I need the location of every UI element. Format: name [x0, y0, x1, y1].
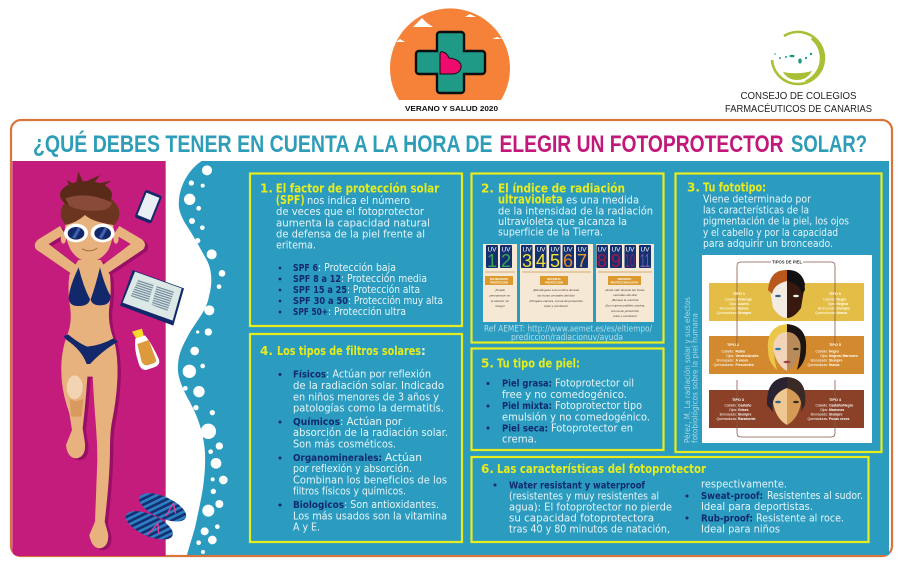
heading 2: El índice de radiación: [498, 182, 625, 196]
UV index chart: solar y sombrero!: [613, 314, 637, 318]
chart labels: Bronceado:: [717, 358, 734, 362]
filter list: Actúan: [385, 452, 422, 464]
filter list: filtros físicos y químicos.: [293, 486, 406, 498]
chart labels: Bronceado:: [720, 306, 737, 310]
chart labels: Negros/ Marrones: [829, 354, 858, 358]
UV index chart: centrales del día!: [613, 293, 637, 297]
heading 5: Tu tipo de piel:: [497, 356, 580, 370]
panel: woman on pink towel: [12, 161, 228, 556]
panel 3: tu fototipo: [676, 174, 882, 452]
legs: [61, 363, 88, 458]
chart labels: Raramente: [738, 417, 756, 421]
UV index chart: 7: [577, 251, 587, 271]
UV index chart: UV: [501, 246, 511, 254]
logo: Consejo de Colegios Farmacéuticos de Canarias: [725, 32, 872, 115]
UV index chart: 10: [625, 251, 635, 271]
UV index chart: UV: [577, 246, 587, 254]
face: tipo 3 y 4: [767, 377, 805, 425]
UV index chart: 5: [550, 251, 560, 271]
heading 4: Los tipos de filtros solares: [277, 344, 421, 358]
SPF list: SPF 6: [293, 263, 318, 274]
description 1: de defensa de la piel frente al: [276, 230, 425, 241]
characteristics list: tras 40 y 80 minutos de natación,: [509, 524, 670, 536]
chart labels: Nunca: [829, 363, 839, 367]
chart labels: Ojos:: [729, 408, 737, 412]
chart labels: Negro: [836, 298, 846, 302]
figure shadow: [38, 228, 148, 550]
panel 2: índice de radiación ultravioleta: [472, 174, 664, 343]
description 2: superficie de la Tierra.: [498, 228, 603, 239]
SPF list: : Protección ultra: [328, 306, 406, 318]
filter list: Los más usados son la vitamina: [293, 510, 447, 522]
chart labels: Nunca: [836, 311, 847, 315]
bikini bottom: [63, 335, 118, 364]
bikini top: [69, 267, 111, 306]
characteristics list: Ideal para niños: [701, 524, 780, 535]
face: tipo 2 y 5: [768, 324, 806, 371]
title: SOLAR?: [791, 131, 867, 158]
chart labels: Cabello:: [816, 350, 828, 354]
heading 1: 1.: [260, 182, 273, 196]
chart labels: Bronceado:: [720, 412, 737, 416]
towel: [12, 161, 166, 556]
UV index chart: ¡Manténgase a la sombra durante: [533, 288, 579, 292]
characteristics list: [494, 479, 863, 536]
description 3: para adquirir un bronceado.: [703, 239, 833, 250]
UV index chart: UV: [625, 246, 635, 254]
filter list: A y E.: [293, 523, 320, 534]
filter list: en niños menores de 3 años y: [293, 392, 439, 403]
panel: beach sea background: [178, 161, 889, 555]
hair: [60, 172, 119, 234]
UV index chart: PROTECCIÓN: [490, 280, 508, 284]
characteristics list: su capacidad fotoprotectora: [509, 514, 654, 525]
skin list: Fotoprotector tipo: [555, 401, 642, 412]
vertical citation: Pérez, M. La radiación solar y sus efectos: [682, 297, 692, 443]
filter list: Combinan los beneficios de los: [293, 475, 447, 486]
SPF list: [279, 262, 443, 318]
chart labels: TIPO 2: [727, 343, 739, 347]
UV index chart: UV: [522, 246, 532, 254]
UV index chart: UV: [550, 246, 560, 254]
icon: sunscreen bottle: [132, 329, 159, 370]
description 3: las características de la: [703, 205, 809, 217]
panel 5: tu tipo de piel: [472, 348, 664, 450]
UV index chart: crema de protección: [611, 309, 639, 313]
heading 6: 6.: [481, 462, 494, 476]
characteristics list: respectivamente.: [701, 479, 787, 490]
chart labels: Cabello:: [816, 404, 828, 408]
UV index chart: NECESITA: [618, 277, 631, 281]
skin list: Fotoprotector oil: [555, 379, 634, 390]
chart labels: Frecuentes: [736, 363, 754, 367]
panel 1: factor de protección solar: [250, 174, 462, 326]
UV index chart: las horas centrales del día!: [538, 294, 575, 298]
chart labels: Quemaduras:: [815, 311, 836, 315]
UV index chart: 1: [487, 251, 497, 271]
chart labels: TIPO 5: [829, 343, 841, 347]
UV index chart: NO NECESITA: [490, 277, 508, 281]
chart labels: Ojos:: [729, 302, 737, 306]
heading 3: [687, 181, 766, 195]
filter list: Físicos: [293, 369, 326, 381]
heading 2: 2.: [481, 182, 494, 196]
description 2: de la intensidad de la radiación: [498, 206, 653, 218]
vertical citation: [682, 297, 700, 443]
description 2: es una medida: [566, 196, 639, 207]
chart labels: Quemaduras:: [716, 417, 737, 421]
UV index chart: PROTECCIÓN: [545, 280, 563, 284]
UV index chart: 3: [522, 251, 532, 271]
filter list: [278, 369, 448, 534]
title: ELEGIR UN FOTOPROTECTOR: [500, 131, 784, 158]
filter list: por reflexión y absorción.: [293, 463, 412, 475]
skin list: emulsión y no comedogénico.: [502, 411, 650, 423]
filter list: absorción de la radiación solar.: [293, 427, 448, 439]
UV index chart: ¡Busque la sombra!: [612, 298, 639, 302]
UV index chart: UV: [563, 246, 573, 254]
chart labels: Ojos:: [820, 408, 828, 412]
description 1: nos indica el número: [307, 195, 410, 207]
chart labels: Siempre: [836, 306, 850, 310]
skin list: Piel grasa:: [502, 379, 552, 390]
UV index chart: 2: [501, 251, 511, 271]
chart labels: Quemaduras:: [807, 417, 828, 421]
description 1: eritema.: [276, 241, 316, 252]
SPF list: : Protección baja: [318, 262, 396, 274]
skin list: Fotoprotector en: [551, 423, 633, 434]
UV index chart: ¡Puede: [495, 288, 505, 292]
chart labels: Quemaduras:: [713, 363, 734, 367]
UV index chart: UV: [487, 246, 497, 254]
chart labels: Marrones: [829, 408, 844, 412]
logo: Verano y Salud 2020: [390, 8, 510, 113]
UV index chart: solar y sombrero!: [544, 304, 568, 308]
chart labels: [713, 292, 858, 421]
filter list: Organominerales:: [293, 453, 382, 464]
characteristics list: agua): El fotoprotector no pierde: [509, 503, 672, 514]
chart labels: Cabello:: [722, 350, 734, 354]
skin types chart: [702, 255, 872, 443]
reference AEMET: prediccion/radiacionuv/ayuda: [511, 333, 623, 343]
filter list: Químicos: [293, 416, 340, 428]
vertical citation: fotobiológicos sobre la piel humana: [690, 313, 700, 443]
characteristics list: Resistente al roce.: [756, 513, 844, 524]
icon: phone: [134, 189, 162, 224]
chart labels: Pocas veces: [829, 417, 849, 421]
filter list: : Son antioxidantes.: [344, 500, 439, 511]
UV index chart: NECESITA: [547, 277, 561, 281]
UV index chart: ¡Evite salir durante las horas: [605, 288, 645, 292]
heading 5: 5.: [481, 356, 494, 370]
SPF list: : Protección alta: [347, 284, 420, 296]
chart labels: Siempre: [738, 412, 751, 416]
chart labels: Castaño/Negro: [829, 404, 853, 408]
title: [33, 130, 867, 158]
UV index chart: [483, 244, 654, 322]
heading 4: :: [421, 344, 426, 358]
characteristics list: (resistentes y muy resistentes al: [509, 492, 659, 503]
description 3: pigmentación de la piel, los ojos: [703, 216, 849, 228]
reference AEMET: Ref AEMET: http://www.aemet.es/es/eltiempo/: [484, 325, 653, 335]
filter list: Biologicos: [293, 500, 344, 511]
chart labels: Quemaduras:: [716, 311, 737, 315]
description 3: y el cabello y por la capacidad: [703, 228, 838, 239]
chart labels: Negros: [836, 302, 848, 306]
characteristics list: Rub-proof:: [701, 513, 753, 524]
chart labels: TIPO 3: [732, 398, 744, 402]
SPF list: SPF 50+: [293, 307, 328, 318]
chart labels: Bronceado:: [811, 412, 828, 416]
heading 4: 4.: [260, 344, 273, 358]
heading 1: [260, 182, 439, 207]
description 1: aumenta la capacidad natural: [276, 219, 430, 230]
chart labels: TIPO 6: [829, 292, 841, 296]
description 1: de veces que el fotoprotector: [276, 207, 425, 218]
UV index chart: UV: [597, 246, 607, 254]
SPF list: SPF 8 a 12: [293, 274, 341, 285]
heading 2: ultravioleta: [498, 193, 563, 207]
chart labels: TIPO 4: [829, 398, 842, 402]
panel 6: características del fotoprotector: [472, 457, 868, 542]
SPF list: SPF 15 a 25: [293, 285, 347, 296]
UV index chart: UV: [640, 246, 650, 254]
sunglasses: [64, 224, 115, 242]
arms: [35, 226, 78, 275]
characteristics list: Ideal para deportistas.: [701, 502, 813, 513]
filter list: : Actúan por: [340, 416, 403, 428]
description 2: [498, 196, 653, 239]
chart labels: Rubio: [736, 350, 745, 354]
SPF list: : Protección media: [341, 273, 427, 285]
heading 3: Tu fototipo:: [703, 181, 766, 195]
description 3: Viene determinado por: [703, 195, 812, 206]
sea bubbles: [183, 165, 228, 554]
logo caption: VERANO Y SALUD 2020: [405, 104, 498, 113]
panel 4: tipos de filtros solares: [250, 334, 462, 542]
description 3: [703, 195, 849, 250]
characteristics list: Resistentes al sudor.: [767, 491, 863, 502]
torso and hips: [61, 260, 118, 377]
skin list: [486, 379, 650, 446]
filter list: patologías como la dermatitis.: [293, 403, 444, 415]
chart labels: Siempre: [829, 412, 842, 416]
chart labels: Cabello:: [725, 404, 737, 408]
chart labels: Pelirrojo: [738, 298, 752, 302]
UV index chart: ¡Póngase camisa, crema de protección: [529, 299, 583, 303]
chart labels: Cabello:: [823, 298, 836, 302]
face: tipo 1 y 6: [768, 270, 805, 318]
UV index chart: 4: [536, 251, 546, 271]
chart labels: TIPO 1: [733, 292, 745, 296]
UV index chart: ¡Son imprescindibles camisa,: [605, 304, 645, 308]
logo text: [725, 91, 872, 115]
title: ¿QUÉ DEBES TENER EN CUENTA A LA HORA DE: [33, 130, 492, 158]
heading 1: (SPF): [276, 193, 305, 207]
SPF list: : Protección muy alta: [348, 295, 443, 307]
chart labels: Grises: [738, 408, 749, 412]
chart labels: Bronceado:: [811, 358, 828, 362]
description 1: [276, 195, 430, 252]
smile: [82, 248, 97, 251]
UV index chart: UV: [536, 246, 546, 254]
chart labels: Castaño: [738, 404, 751, 408]
skin list: Piel seca:: [502, 423, 548, 434]
chart labels: Ojos:: [820, 354, 828, 358]
SPF list: SPF 30 a 50: [293, 296, 348, 307]
main frame: [11, 120, 892, 556]
chart labels: A veces: [736, 358, 748, 362]
chart labels: Siempre: [738, 311, 751, 315]
face: [65, 215, 113, 262]
UV index chart: 11: [640, 251, 650, 271]
description 2: ultravioleta que alcanza la: [498, 217, 627, 228]
icon: book: [120, 270, 184, 326]
heading 2: [481, 182, 625, 207]
filter list: : Actúan por reflexión: [326, 369, 431, 381]
chart labels: Negro: [829, 350, 839, 354]
chart labels: Verdes/Azules: [736, 354, 759, 358]
UV index chart: 8: [597, 251, 607, 271]
chart labels: Nunca: [738, 306, 748, 310]
heading 6: Las características del fotoprotector: [497, 462, 706, 476]
heading 1: El factor de protección solar: [276, 182, 439, 196]
chart labels: Quemaduras:: [807, 363, 828, 367]
woman: [35, 172, 145, 548]
UV index chart: 9: [611, 251, 621, 271]
skin list: Piel mixta:: [502, 401, 552, 412]
skin types chart: TIPOS DE PIEL: [772, 260, 802, 264]
chart labels: Ojos:: [828, 302, 836, 306]
chart labels: Bronceado:: [818, 306, 836, 310]
chart labels: Azules: [738, 302, 749, 306]
characteristics list: Water resistant y waterproof: [509, 480, 646, 491]
UV index chart: 6: [563, 251, 573, 271]
skin list: crema.: [502, 435, 537, 446]
filter list: de la radiación solar. Indicado: [293, 380, 444, 392]
characteristics list: Sweat-proof:: [701, 491, 763, 502]
chart labels: Ojos:: [726, 354, 734, 358]
UV index chart: PROTECCIÓN EXTRA: [611, 280, 638, 284]
skin list: free y no comedogénico.: [502, 389, 627, 401]
UV index chart: UV: [611, 246, 621, 254]
UV index chart: el exterior sin: [491, 299, 509, 303]
icon: flip flops: [122, 487, 190, 545]
UV index chart: permanecer en: [489, 294, 511, 298]
heading 3: 3.: [687, 181, 700, 195]
UV index chart: riesgo!: [495, 304, 505, 308]
logo text: CONSEJO DE COLEGIOS: [740, 91, 857, 102]
chart labels: Cabello:: [725, 298, 737, 302]
chart labels: Siempre: [829, 358, 842, 362]
reference AEMET: [484, 325, 653, 343]
filter list: Son más cosméticos.: [293, 438, 396, 450]
logo text: FARMACÉUTICOS DE CANARIAS: [725, 102, 872, 115]
